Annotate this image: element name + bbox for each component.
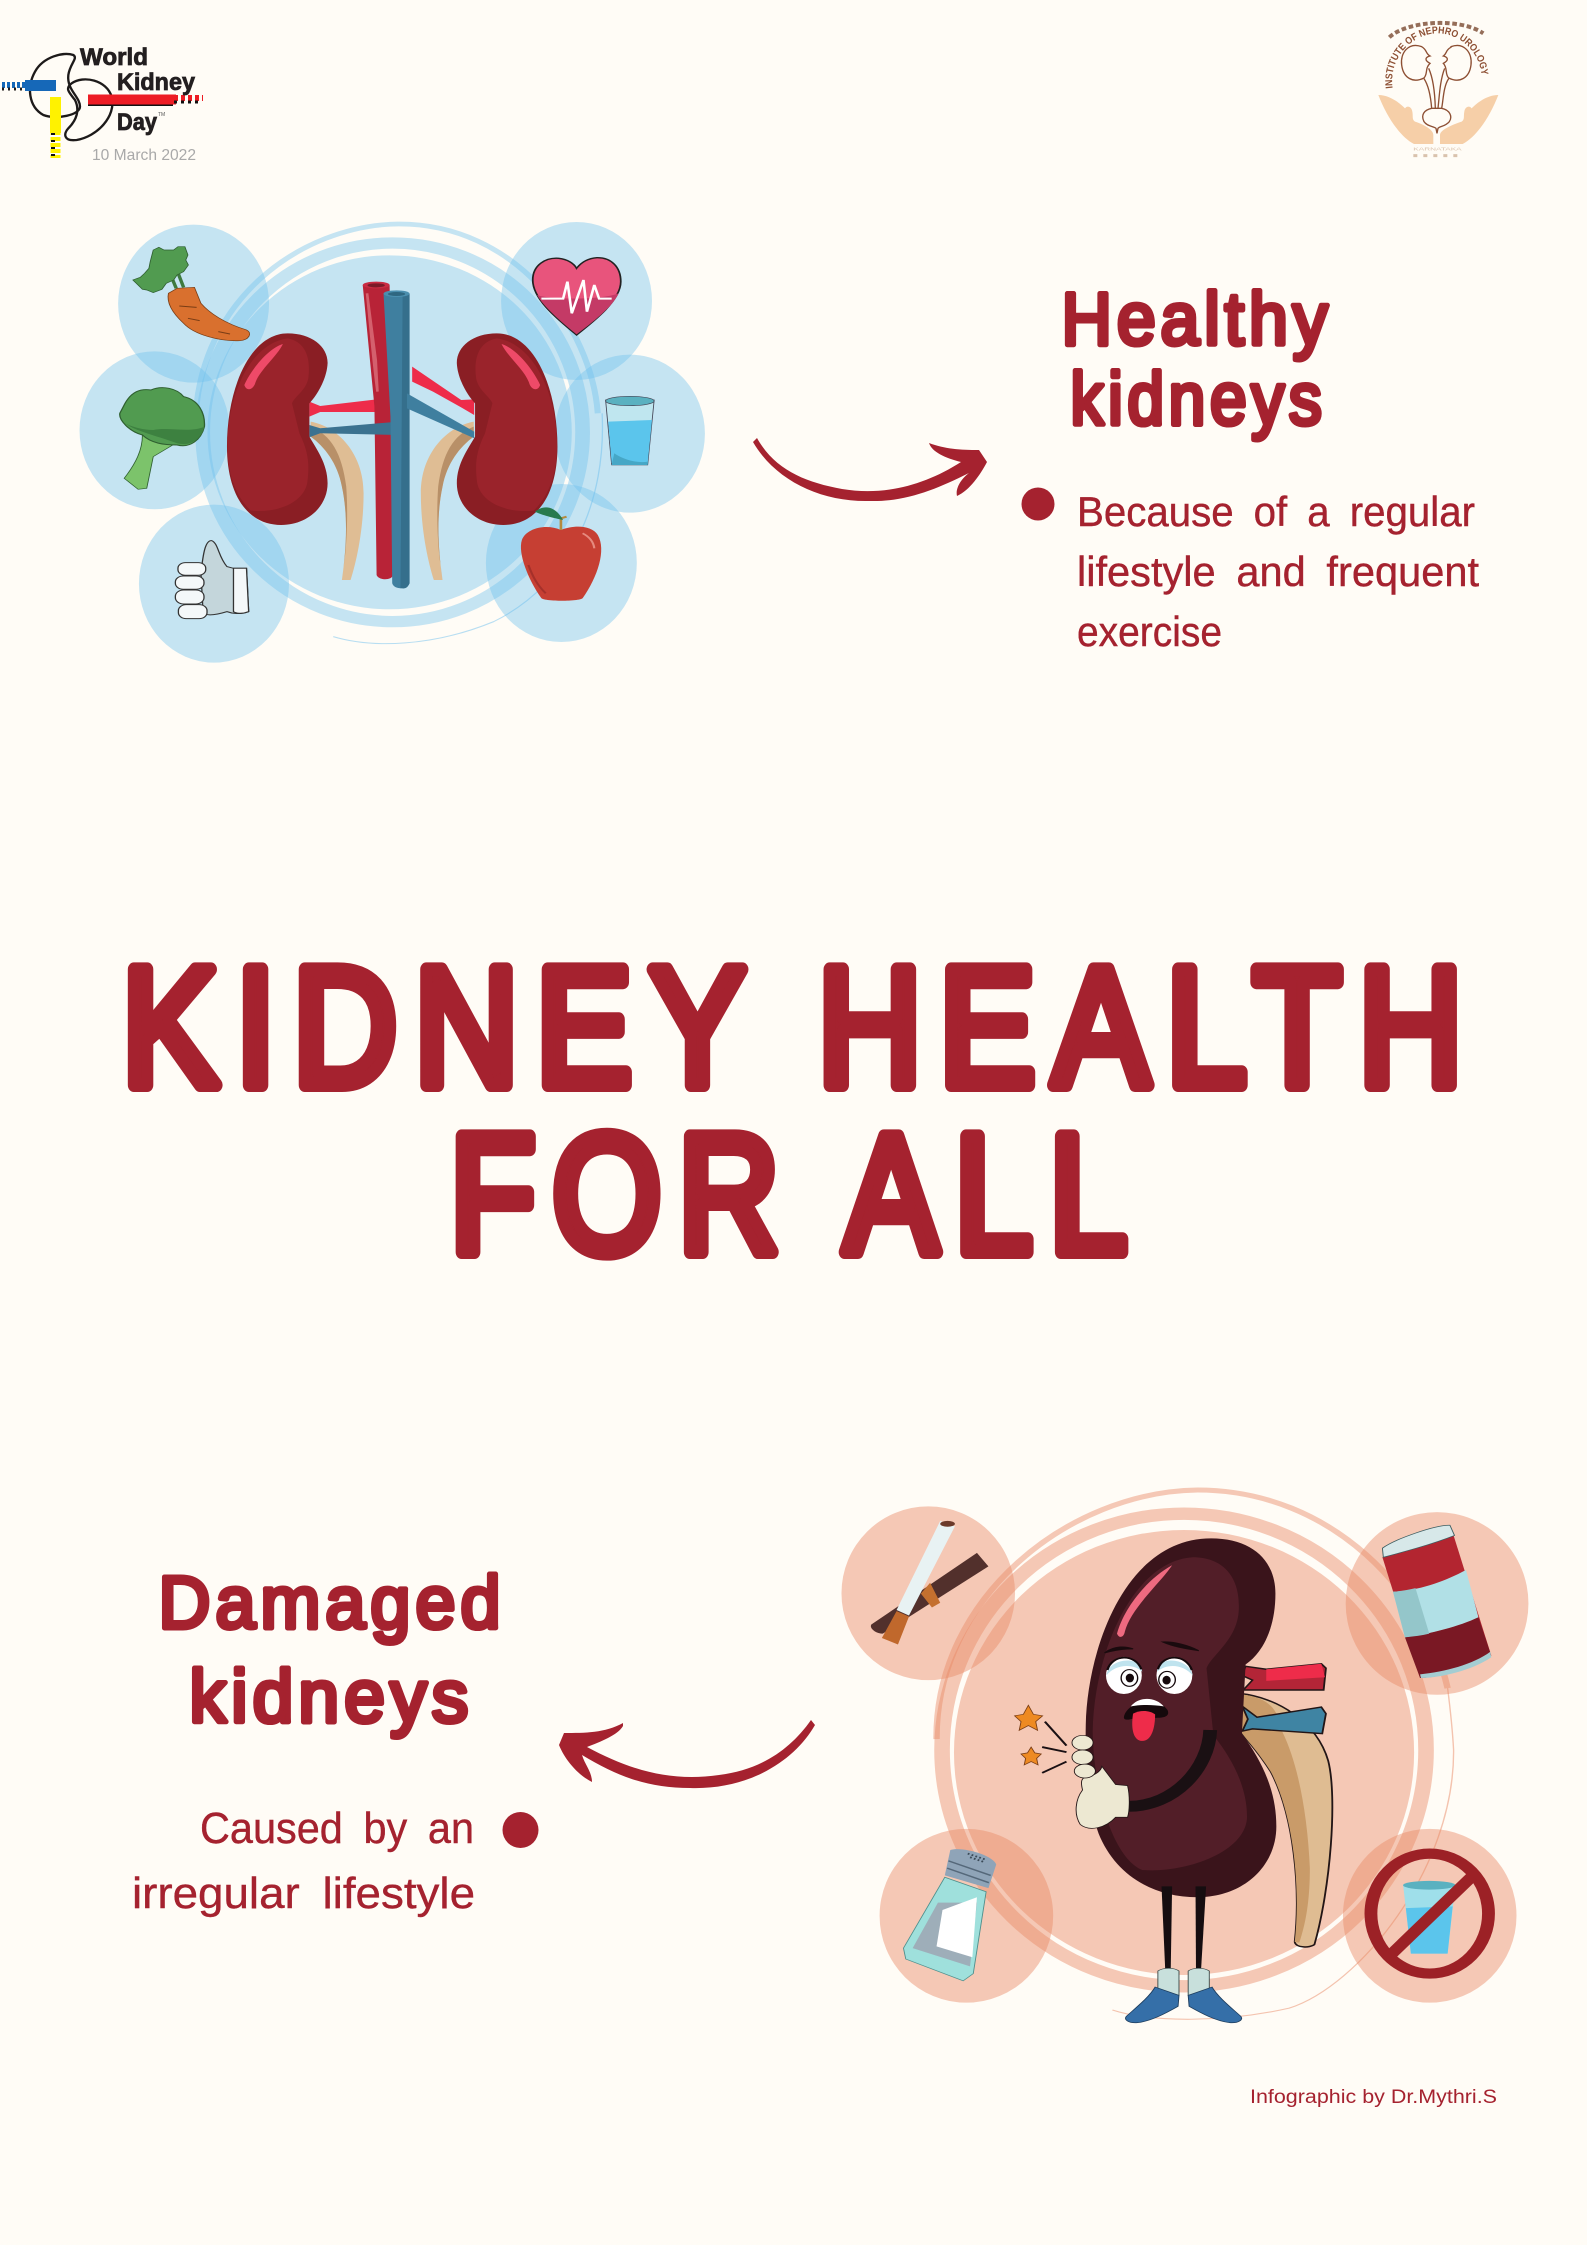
illustration: healthy kidneys bbox=[80, 222, 705, 663]
logo: Institute of Nephro Urology bbox=[1378, 20, 1498, 158]
central disc and rings bbox=[937, 1490, 1454, 2019]
logo: World Kidney Day: Day bbox=[117, 109, 158, 136]
icon: soda can bbox=[1382, 1525, 1491, 1678]
text: because of a regular lifestyle: Because of a regular bbox=[1077, 488, 1475, 535]
icon: cigar and cigarette bbox=[871, 1521, 988, 1645]
icon: thumbs up bbox=[175, 541, 249, 619]
character: arm and hand bbox=[1072, 1730, 1210, 1828]
text: because of a regular lifestyle: lifestyle and frequent bbox=[1077, 548, 1479, 595]
heading: Damaged kidneys: kidneys bbox=[190, 1655, 474, 1738]
title bbox=[122, 933, 1480, 1288]
ureter bbox=[1241, 1694, 1332, 1947]
satellite circles bbox=[80, 222, 705, 663]
icon: glass of water bbox=[606, 396, 654, 465]
logo: World Kidney Day: World bbox=[80, 44, 148, 71]
character: kidney body bbox=[1086, 1538, 1276, 1897]
text: because of a regular lifestyle bbox=[1077, 488, 1479, 655]
arrow: healthy kidneys to text bbox=[753, 438, 987, 501]
logo: World Kidney Day: TM bbox=[158, 112, 165, 118]
left kidney bbox=[227, 333, 328, 525]
renal vessels bbox=[1242, 1664, 1326, 1734]
icon: heart bbox=[533, 258, 621, 335]
text: caused by an irregular lifestyle: Caused by an bbox=[200, 1804, 474, 1853]
logo: Institute of Nephro Urology: INSTITUTE OF NEPHRO UROLOGY bbox=[1385, 26, 1488, 88]
heading: Damaged kidneys: Damaged bbox=[158, 1561, 506, 1644]
credit: Infographic by Dr.Mythri.S bbox=[1250, 2087, 1497, 2108]
bullet dot bbox=[1022, 488, 1054, 520]
icon: carrot bbox=[133, 247, 250, 341]
heading: Healthy kidneys bbox=[1062, 278, 1332, 440]
logo: Institute of Nephro Urology: KARNATAKA bbox=[1413, 147, 1463, 152]
bullet dot bbox=[502, 1812, 538, 1848]
renal arteries bbox=[309, 367, 474, 417]
icon: broccoli bbox=[120, 388, 204, 489]
icon: salt shaker bbox=[903, 1849, 996, 1981]
aorta bbox=[363, 282, 393, 579]
heading: Healthy kidneys: Healthy bbox=[1062, 278, 1332, 360]
heading: Damaged kidneys bbox=[158, 1561, 506, 1738]
vena cava bbox=[309, 290, 474, 588]
icon: apple bbox=[521, 507, 601, 601]
heading: Healthy kidneys: kidneys bbox=[1070, 358, 1326, 440]
central disc and rings bbox=[195, 224, 602, 644]
logo: World Kidney Day: 10 March 2022 bbox=[92, 147, 196, 164]
text: caused by an irregular lifestyle: irregular lifestyle bbox=[132, 1869, 475, 1918]
text: because of a regular lifestyle: exercise bbox=[1077, 608, 1222, 655]
logo: World Kidney Day: Kidney bbox=[117, 69, 196, 96]
character: face bbox=[1105, 1642, 1199, 1741]
character: legs bbox=[1162, 1886, 1206, 1970]
right kidney bbox=[457, 333, 557, 525]
ureters bbox=[311, 422, 474, 580]
icon: no water bbox=[1371, 1854, 1488, 1974]
pain stars and sparks bbox=[1015, 1705, 1066, 1773]
logo: World Kidney Day bbox=[2, 44, 203, 164]
text: caused by an irregular lifestyle bbox=[132, 1804, 475, 1918]
character: shoes bbox=[1126, 1968, 1242, 2023]
title: FOR ALL bbox=[450, 1100, 1144, 1288]
illustration: damaged kidney bbox=[841, 1490, 1528, 2023]
satellite circles bbox=[841, 1506, 1528, 2003]
arrow: damaged kidney to text bbox=[559, 1720, 815, 1788]
